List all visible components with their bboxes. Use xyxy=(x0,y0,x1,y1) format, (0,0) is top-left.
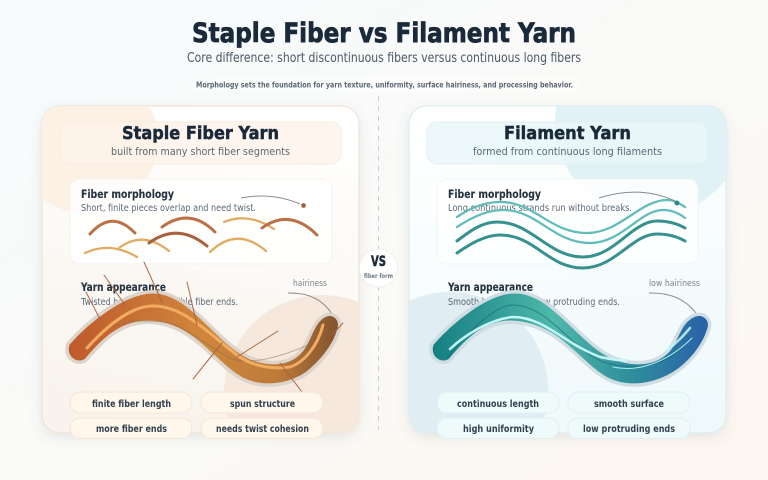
vs badge: VS xyxy=(371,254,386,270)
fiber morphology box: Long continuous strands run without breaks. xyxy=(448,203,632,214)
heading: filament yarn xyxy=(427,122,708,164)
panel background xyxy=(42,106,359,433)
heading: staple fiber yarn: Staple Fiber Yarn xyxy=(122,124,279,144)
heading: staple fiber yarn xyxy=(60,122,341,164)
intro note xyxy=(190,77,579,92)
panel: filament yarn xyxy=(406,106,729,440)
hairiness label: hairiness xyxy=(293,279,327,289)
panel: staple fiber yarn xyxy=(39,106,362,440)
yarn illustration: staple xyxy=(69,262,343,392)
trait chips: filament: continuous length xyxy=(457,399,539,410)
panel background xyxy=(409,106,726,433)
fiber morphology box: Short, finite pieces overlap and need twist. xyxy=(81,203,256,214)
trait chips: staple: spun structure xyxy=(230,399,295,410)
continuous filaments xyxy=(457,200,685,268)
intro note: Morphology sets the foundation for yarn texture, uniformity, surface hairiness, and processing behavior. xyxy=(196,80,573,90)
trait chips: staple: needs twist cohesion xyxy=(216,424,309,435)
trait chips: filament: low protruding ends xyxy=(583,424,675,435)
hairiness label xyxy=(288,279,332,314)
annotation leader xyxy=(241,196,306,208)
yarn appearance text xyxy=(80,280,238,308)
low hairiness label xyxy=(649,279,701,313)
heading: staple fiber yarn: built from many short fiber segments xyxy=(111,146,290,158)
vs badge: fiber form xyxy=(364,272,393,280)
heading: filament yarn: formed from continuous long filaments xyxy=(473,146,662,158)
title: Staple Fiber vs Filament Yarn xyxy=(192,18,576,49)
trait chips: filament: high uniformity xyxy=(463,424,534,435)
yarn illustration: filament xyxy=(433,294,707,383)
trait chips: staple: finite fiber length xyxy=(92,399,171,410)
low hairiness label: low hairiness xyxy=(649,279,701,289)
fiber morphology box: Fiber morphology xyxy=(81,187,174,201)
fiber morphology box xyxy=(70,179,332,264)
trait chips: filament: smooth surface xyxy=(594,399,664,410)
yarn appearance text: Twisted bundles with visible fiber ends. xyxy=(80,297,238,308)
short fibers xyxy=(85,218,317,257)
vs badge xyxy=(360,249,398,287)
yarn appearance text: Yarn appearance xyxy=(80,280,166,294)
background blobs xyxy=(410,106,726,432)
trait chips: staple xyxy=(70,392,323,438)
yarn appearance text: Yarn appearance xyxy=(447,280,533,294)
background blobs xyxy=(42,106,359,433)
yarn appearance text: Smooth bundles with few protruding ends. xyxy=(448,297,620,308)
annotation leader xyxy=(599,192,679,205)
fiber morphology box: Fiber morphology xyxy=(448,187,541,201)
protruding fiber ends xyxy=(86,262,343,392)
yarn appearance text xyxy=(447,280,620,308)
trait chips: staple: more fiber ends xyxy=(96,424,167,435)
subtitle: Core difference: short discontinuous fibers versus continuous long fibers xyxy=(187,51,581,66)
trait chips: filament xyxy=(437,392,690,438)
heading: filament yarn: Filament Yarn xyxy=(504,124,631,144)
fiber morphology box xyxy=(437,179,698,268)
